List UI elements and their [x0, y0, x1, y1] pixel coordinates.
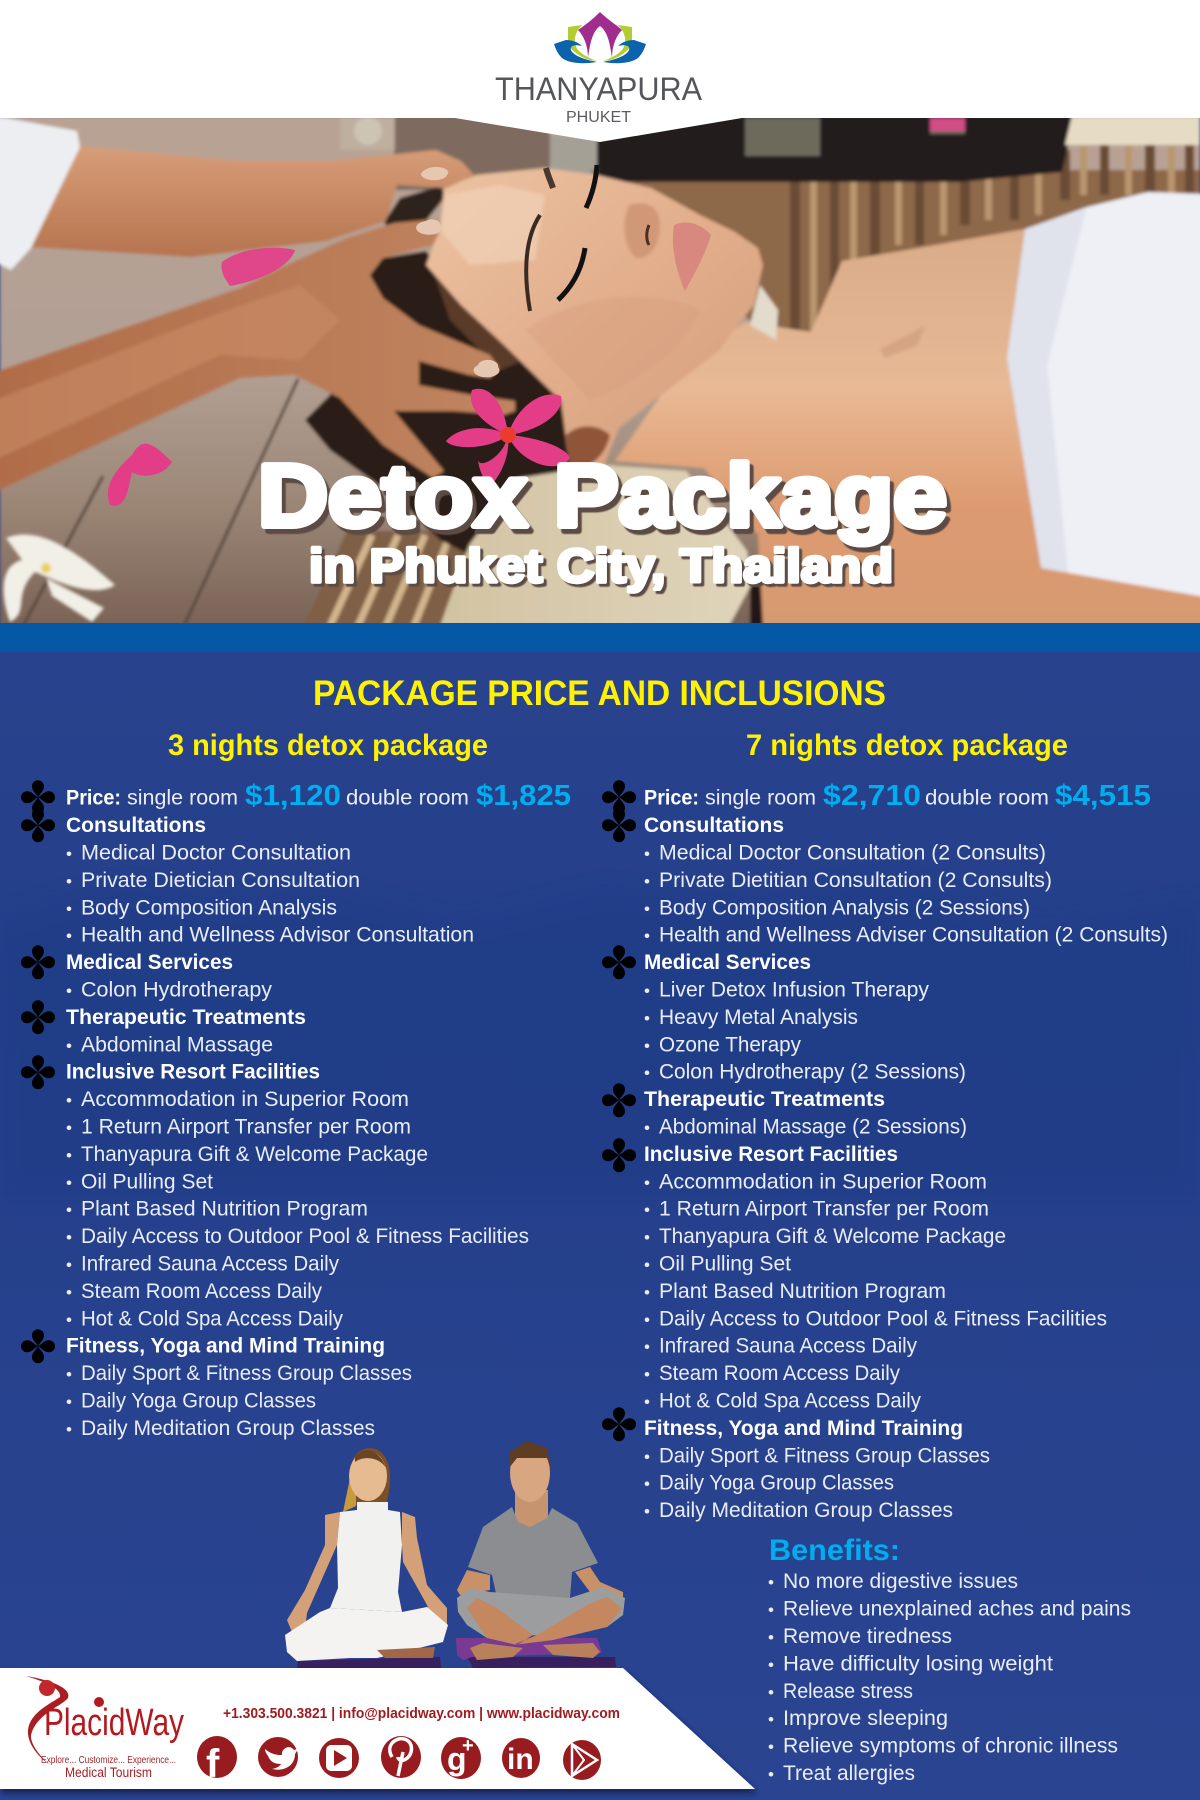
white footer shape: [0, 1668, 755, 1789]
section: medical services: Medical Services: [66, 951, 233, 974]
benefits list: Treat allergies: [783, 1762, 915, 1785]
section: consultations: [21, 808, 474, 947]
wood planks: [23, 379, 298, 626]
section: fitness, yoga and mind training: •: [66, 1365, 72, 1384]
icon: play store: [563, 1740, 601, 1780]
section: fitness, yoga and mind training: •: [644, 1447, 650, 1466]
heading: package price and inclusions: PACKAGE PRICE AND INCLUSIONS: [313, 674, 886, 713]
icon: youtube: [319, 1738, 359, 1778]
upper arm: [29, 143, 474, 257]
illustration: woman meditating: [285, 1448, 448, 1669]
icon: pinterest: [381, 1736, 421, 1778]
section: inclusive resort facilities: 1 Return Airport Transfer per Room: [81, 1116, 411, 1139]
benefits heading: Benefits:: [769, 1534, 900, 1567]
section: inclusive resort facilities: •: [644, 1393, 650, 1412]
section: inclusive resort facilities: Steam Room Access Daily: [659, 1362, 900, 1385]
contact details: +1.303.500.3821 | info@placidway.com | www.placidway.com: [223, 1705, 620, 1722]
section: inclusive resort facilities: Oil Pulling Set: [659, 1253, 791, 1276]
section: consultations: •: [66, 872, 72, 891]
benefits list: Relieve symptoms of chronic illness: [783, 1735, 1118, 1758]
benefits list: Improve sleeping: [783, 1707, 948, 1730]
section: medical services: Ozone Therapy: [659, 1033, 801, 1056]
footer contact panel: [0, 1668, 755, 1789]
section: fitness, yoga and mind training: Daily Meditation Group Classes: [81, 1417, 375, 1440]
section: medical services: [602, 945, 966, 1084]
pale backrest: [750, 285, 778, 340]
section: inclusive resort facilities: Inclusive Resort Facilities: [66, 1061, 320, 1084]
subtitle: in Phuket City, Thailand: [309, 539, 893, 592]
price line: Price:: [644, 787, 699, 810]
section: inclusive resort facilities: •: [644, 1310, 650, 1329]
section: medical services: •: [644, 1064, 650, 1083]
section: inclusive resort facilities: Thanyapura Gift & Welcome Package: [659, 1225, 1006, 1248]
section: therapeutic treatments: Therapeutic Treatments: [66, 1006, 306, 1029]
logo: PlacidWay: Explore... Customize... Experience...: [41, 1754, 176, 1766]
pillow: [440, 465, 751, 626]
icon: linkedin: [502, 1738, 540, 1778]
section: inclusive resort facilities: •: [66, 1146, 72, 1165]
panel: 3 nights detox package: [21, 729, 571, 1440]
section: consultations: Consultations: [66, 814, 206, 837]
price line: $1,825: [476, 780, 571, 812]
section: medical services: Colon Hydrotherapy (2 Sessions): [659, 1061, 966, 1084]
benefits list: Relieve unexplained aches and pains: [783, 1598, 1131, 1621]
section: therapeutic treatments: •: [66, 1036, 72, 1055]
lower arm and hand: [0, 220, 515, 492]
section: inclusive resort facilities: Thanyapura Gift & Welcome Package: [81, 1143, 428, 1166]
section: inclusive resort facilities: •: [66, 1283, 72, 1302]
section: consultations: Medical Doctor Consultation (2 Consults): [659, 841, 1046, 864]
section: inclusive resort facilities: Accommodation in Superior Room: [81, 1088, 409, 1111]
bamboo mat: [304, 531, 469, 626]
section: fitness, yoga and mind training: [602, 1407, 990, 1522]
section: inclusive resort facilities: •: [644, 1283, 650, 1302]
section: consultations: •: [66, 899, 72, 918]
section: therapeutic treatments: Abdominal Massage (2 Sessions): [659, 1116, 967, 1139]
pink flowers: [108, 248, 570, 506]
section: inclusive resort facilities: •: [66, 1119, 72, 1138]
bamboo backdrop: [590, 168, 1200, 333]
section: therapeutic treatments: [602, 1083, 967, 1138]
section: consultations: [602, 808, 1168, 947]
section: inclusive resort facilities: Accommodation in Superior Room: [659, 1170, 987, 1193]
body: [615, 229, 1200, 626]
section: consultations: Medical Doctor Consultation: [81, 841, 351, 864]
icon: facebook: [197, 1736, 237, 1786]
section: inclusive resort facilities: Infrared Sauna Access Daily: [81, 1253, 339, 1276]
section: inclusive resort facilities: •: [66, 1256, 72, 1275]
column heading: 7 nights detox package: [746, 729, 1068, 762]
section: inclusive resort facilities: Daily Access to Outdoor Pool & Fitness Facilities: [659, 1307, 1107, 1330]
section: inclusive resort facilities: Oil Pulling Set: [81, 1170, 213, 1193]
hero photo: spa massage: [0, 116, 1200, 626]
price line: $1,120: [245, 780, 341, 812]
face: [426, 168, 763, 470]
panel: 7 nights detox package: [602, 729, 1168, 1522]
section: inclusive resort facilities: •: [66, 1201, 72, 1220]
section: fitness, yoga and mind training: Daily Yoga Group Classes: [659, 1472, 894, 1495]
price line: double room: [346, 787, 469, 810]
section: inclusive resort facilities: •: [644, 1228, 650, 1247]
price line: [21, 780, 571, 814]
icon: google plus: [441, 1735, 481, 1779]
section: consultations: Private Dietitian Consultation (2 Consults): [659, 869, 1052, 892]
section: inclusive resort facilities: •: [644, 1338, 650, 1357]
section: consultations: Private Dietician Consultation: [81, 869, 360, 892]
icon: linkedin: in: [507, 1743, 534, 1776]
section: medical services: •: [644, 1036, 650, 1055]
face details: [416, 165, 711, 377]
section: inclusive resort facilities: •: [644, 1201, 650, 1220]
section: inclusive resort facilities: •: [644, 1256, 650, 1275]
benefits list: •: [768, 1710, 774, 1729]
section: inclusive resort facilities: Infrared Sauna Access Daily: [659, 1335, 917, 1358]
section: inclusive resort facilities: Plant Based Nutrition Program: [659, 1280, 946, 1303]
section: medical services: •: [644, 981, 650, 1000]
icon: facebook: f: [206, 1742, 220, 1786]
section: medical services: Heavy Metal Analysis: [659, 1006, 858, 1029]
benefits list: •: [768, 1655, 774, 1674]
section: inclusive resort facilities: •: [66, 1310, 72, 1329]
logo: PlacidWay: PlacidWay: [44, 1702, 184, 1744]
logo: PlacidWay: Medical Tourism: [65, 1765, 152, 1780]
section: consultations: •: [644, 872, 650, 891]
benefits list: Have difficulty losing weight: [783, 1652, 1053, 1675]
section: therapeutic treatments: •: [644, 1119, 650, 1138]
section: fitness, yoga and mind training: Fitness, Yoga and Mind Training: [644, 1417, 963, 1440]
section: fitness, yoga and mind training: [21, 1329, 412, 1440]
section: fitness, yoga and mind training: •: [66, 1393, 72, 1412]
benefits list: •: [768, 1628, 774, 1647]
background mountains: [0, 880, 1200, 1200]
section: inclusive resort facilities: [602, 1138, 1107, 1412]
section: fitness, yoga and mind training: Daily Meditation Group Classes: [659, 1499, 953, 1522]
benefits list: No more digestive issues: [783, 1570, 1018, 1593]
main title: Detox Package: [258, 446, 947, 545]
benefits list: Release stress: [783, 1680, 913, 1703]
towel: [1032, 189, 1200, 599]
section: inclusive resort facilities: Steam Room Access Daily: [81, 1280, 322, 1303]
section: inclusive resort facilities: Plant Based Nutrition Program: [81, 1198, 368, 1221]
benefits list: •: [768, 1738, 774, 1757]
benefits list: •: [768, 1601, 774, 1620]
section: consultations: •: [644, 844, 650, 863]
price line: Price:: [66, 787, 121, 810]
price line: single room: [127, 787, 238, 810]
section: fitness, yoga and mind training: Daily Sport & Fitness Group Classes: [81, 1362, 412, 1385]
section: consultations: •: [66, 927, 72, 946]
section: inclusive resort facilities: [21, 1055, 529, 1330]
section: inclusive resort facilities: •: [644, 1173, 650, 1192]
section: inclusive resort facilities: •: [66, 1173, 72, 1192]
section: consultations: •: [644, 899, 650, 918]
section: consultations: Consultations: [644, 814, 784, 837]
section: inclusive resort facilities: 1 Return Airport Transfer per Room: [659, 1198, 989, 1221]
wordmark: THANYAPURA: [495, 71, 703, 107]
section: consultations: Body Composition Analysis (2 Sessions): [659, 896, 1030, 919]
section: medical services: •: [644, 1009, 650, 1028]
icon: google plus: g: [447, 1741, 467, 1777]
section: inclusive resort facilities: •: [644, 1365, 650, 1384]
section: inclusive resort facilities: Hot & Cold Spa Access Daily: [659, 1390, 921, 1413]
price line: [602, 780, 1151, 814]
section: fitness, yoga and mind training: •: [644, 1502, 650, 1521]
section: fitness, yoga and mind training: •: [66, 1420, 72, 1439]
price line: double room: [925, 787, 1049, 810]
title: [258, 446, 947, 592]
benefits list: Remove tiredness: [783, 1625, 952, 1648]
header white band: [0, 0, 1200, 142]
benefits list: •: [768, 1765, 774, 1784]
section: medical services: •: [66, 981, 72, 1000]
blue band: [0, 623, 1200, 652]
section: medical services: Colon Hydrotherapy: [81, 978, 273, 1001]
price line: $4,515: [1055, 780, 1151, 812]
section: fitness, yoga and mind training: •: [644, 1475, 650, 1494]
section: medical services: Liver Detox Infusion Therapy: [659, 978, 929, 1001]
illustration: man meditating: [456, 1441, 625, 1668]
icon: twitter: [258, 1737, 298, 1777]
section: consultations: Health and Wellness Advisor Consultation: [81, 924, 474, 947]
section: inclusive resort facilities: Hot & Cold Spa Access Daily: [81, 1307, 343, 1330]
location: PHUKET: [566, 109, 631, 126]
logo: PlacidWay: [26, 1676, 184, 1780]
icon: google plus: +: [462, 1735, 474, 1757]
price line: single room: [705, 787, 816, 810]
benefits list: [768, 1570, 1131, 1785]
benefits list: •: [768, 1573, 774, 1592]
column heading: 3 nights detox package: [168, 729, 488, 762]
section: therapeutic treatments: [21, 1000, 306, 1056]
section: inclusive resort facilities: Inclusive Resort Facilities: [644, 1143, 898, 1166]
section: fitness, yoga and mind training: Daily Sport & Fitness Group Classes: [659, 1444, 990, 1467]
section: consultations: •: [644, 927, 650, 946]
section: consultations: Body Composition Analysis: [81, 896, 337, 919]
section: medical services: [21, 945, 273, 1002]
section: fitness, yoga and mind training: Daily Yoga Group Classes: [81, 1390, 316, 1413]
benefits list: •: [768, 1683, 774, 1702]
section: medical services: Medical Services: [644, 951, 811, 974]
icon: lotus: [554, 12, 646, 63]
section: therapeutic treatments: Therapeutic Treatments: [644, 1088, 885, 1111]
section: inclusive resort facilities: Daily Access to Outdoor Pool & Fitness Facilities: [81, 1225, 529, 1248]
section: fitness, yoga and mind training: Fitness, Yoga and Mind Training: [66, 1335, 385, 1358]
logo: Thanyapura Phuket: [495, 12, 703, 126]
section: inclusive resort facilities: •: [66, 1091, 72, 1110]
white flower: [4, 534, 115, 622]
price line: $2,710: [823, 780, 921, 812]
section: inclusive resort facilities: •: [66, 1228, 72, 1247]
panel: benefits: [768, 1534, 1131, 1785]
section: consultations: •: [66, 844, 72, 863]
section: consultations: Health and Wellness Adviser Consultation (2 Consults): [659, 924, 1168, 947]
hair: [305, 251, 579, 560]
section: therapeutic treatments: Abdominal Massage: [81, 1033, 273, 1056]
sleeve: [0, 116, 80, 270]
